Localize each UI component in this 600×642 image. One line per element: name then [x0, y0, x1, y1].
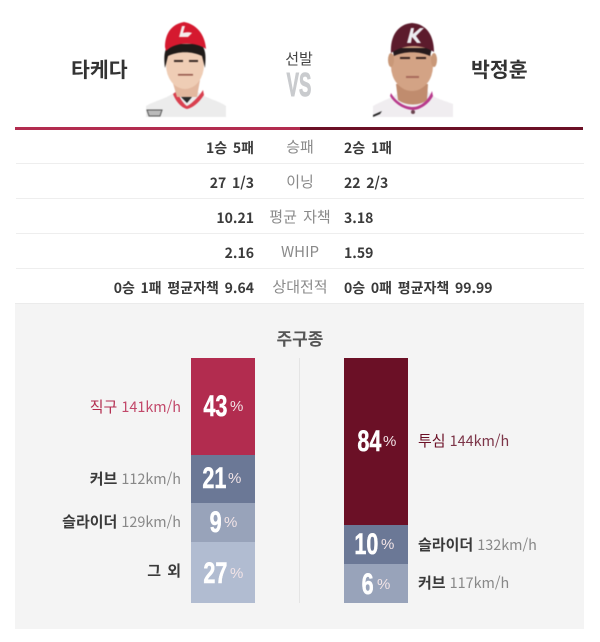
- segment: fastball 43%: %: [230, 398, 243, 415]
- segment: fastball 43%: 43: [203, 390, 227, 423]
- photo: right pitcher: [372, 22, 453, 118]
- row: WHIP: 1.59: [344, 243, 373, 263]
- segment: slider 9%: 9: [210, 506, 222, 539]
- label: curve: 커브 112km/h: [90, 468, 181, 489]
- row: ERA: 평균 자책: [269, 206, 331, 227]
- label: others: 그 외: [147, 560, 181, 581]
- bar chart: right pitcher: [344, 358, 408, 603]
- segment: curve 21%: %: [228, 470, 241, 487]
- segment: curve 6%: 6: [362, 568, 374, 601]
- heading: main pitches: 주구종: [277, 325, 323, 350]
- segment: slider 9%: [191, 503, 255, 542]
- segment: slider 9%: %: [224, 514, 237, 531]
- row: ERA: 3.18: [344, 208, 373, 228]
- segment: four-seam 84%: 84: [357, 425, 381, 458]
- label: curve right: 커브 117km/h: [418, 572, 509, 593]
- photo: left pitcher: [146, 21, 226, 118]
- segment: slider 10%: [344, 525, 408, 564]
- segment: others 27%: %: [230, 565, 243, 582]
- row: WHIP: [225, 241, 373, 263]
- row: head-to-head: 0승 1패 평균자책 9.64: [114, 278, 254, 298]
- row: WHIP: 2.16: [225, 243, 254, 263]
- header rule: right team colour: [300, 127, 583, 130]
- stats table: [114, 136, 493, 298]
- player name: right: 박정훈: [471, 53, 528, 83]
- label: slider: 슬라이더 129km/h: [62, 511, 181, 532]
- segment: others 27%: [191, 542, 255, 603]
- row: win-loss: 승패: [286, 136, 314, 157]
- segment: curve 21%: 21: [202, 462, 226, 495]
- row: win-loss: 1승 5패: [206, 138, 254, 158]
- label: slider right: 슬라이더 132km/h: [418, 534, 537, 555]
- row: head-to-head: [114, 276, 493, 298]
- panel: pitch mix: [15, 303, 584, 629]
- bar chart: left pitcher: [191, 358, 255, 603]
- segment: curve 6%: [344, 564, 408, 603]
- segment: fastball 43%: [191, 358, 255, 455]
- segment: others 27%: 27: [203, 557, 227, 590]
- label: starter: 선발: [285, 48, 313, 69]
- segment: slider 10%: %: [381, 536, 394, 553]
- player name: left: 타케다: [71, 53, 128, 83]
- segment: curve 6%: %: [377, 576, 390, 593]
- row: win-loss: 2승 1패: [344, 138, 392, 158]
- row: head-to-head: 0승 0패 평균자책 99.99: [344, 278, 493, 298]
- label: fastball: 직구 141km/h: [90, 396, 181, 417]
- row: head-to-head: 상대전적: [272, 276, 328, 297]
- row: WHIP: WHIP: [281, 241, 319, 262]
- row: innings: [210, 171, 388, 193]
- segment: slider 10%: 10: [354, 528, 378, 561]
- row: ERA: 10.21: [216, 208, 254, 228]
- segment: four-seam 84%: %: [383, 433, 396, 450]
- label: VS: VS: [287, 66, 311, 103]
- row: innings: 22 2/3: [344, 173, 388, 193]
- segment: four-seam 84%: [344, 358, 408, 525]
- row: innings: 이닝: [286, 171, 314, 192]
- row: ERA: [216, 206, 373, 228]
- segment: curve 21%: [191, 455, 255, 503]
- row: win-loss: [206, 136, 392, 158]
- label: four-seam: 투심 144km/h: [418, 430, 509, 451]
- header rule: left team colour: [15, 127, 300, 130]
- row: innings: 27 1/3: [210, 173, 254, 193]
